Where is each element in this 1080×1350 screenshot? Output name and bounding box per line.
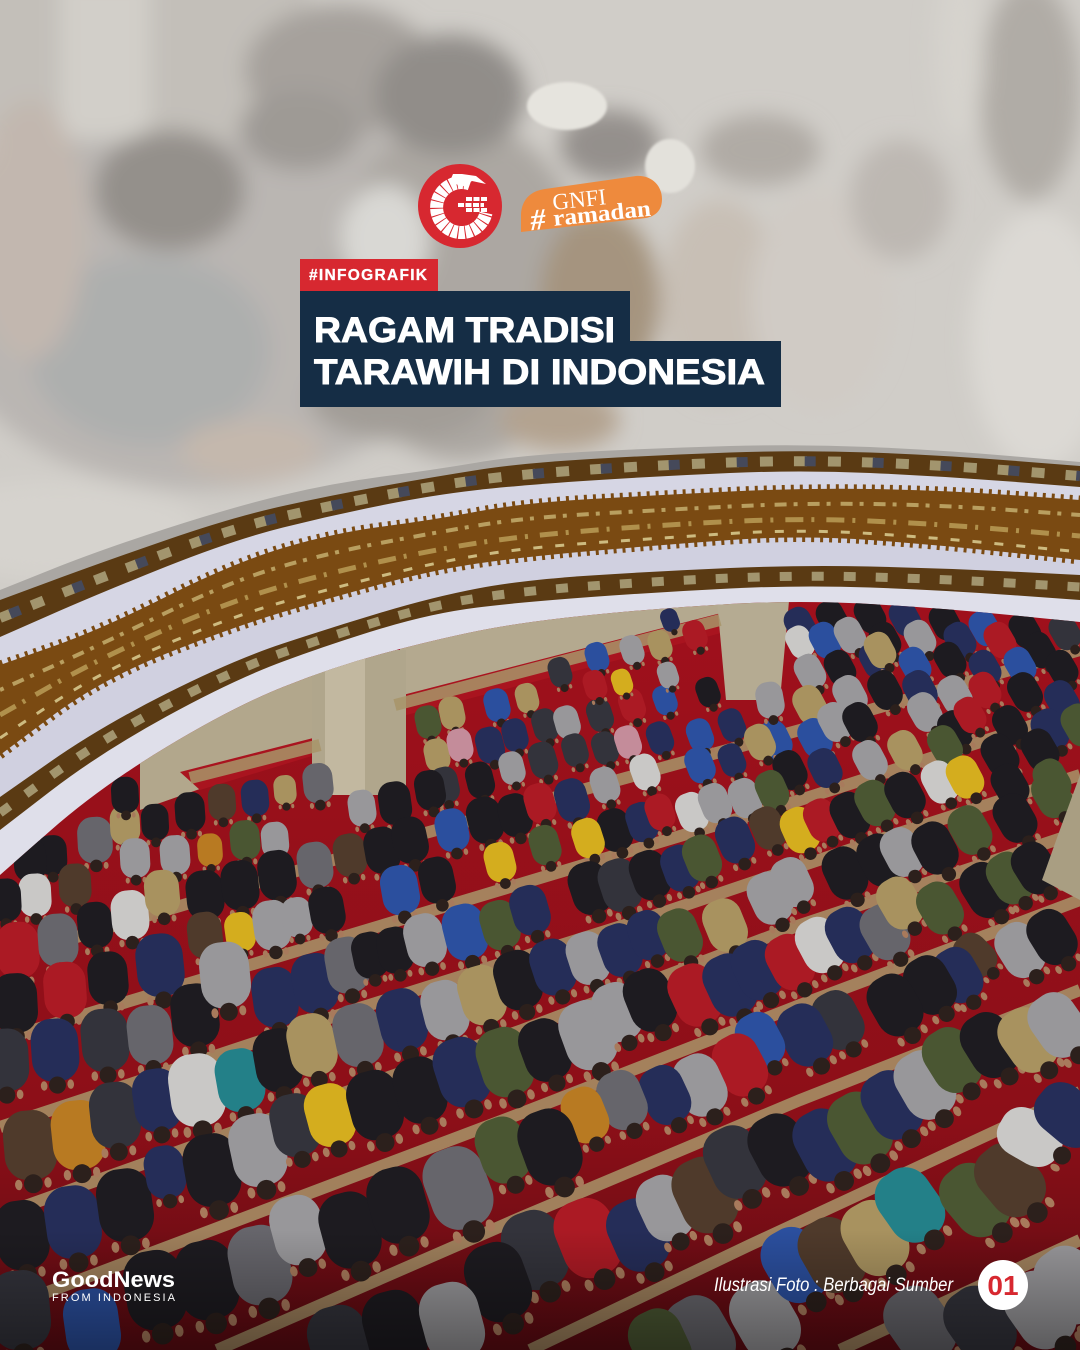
lavender panel [0, 472, 1080, 1000]
rows: upper centre [412, 606, 1080, 819]
floor carpet, walls and pillars [0, 590, 1080, 1350]
page number badge [978, 1260, 1028, 1310]
tag: #INFOGRAFIK: #INFOGRAFIK [309, 267, 428, 284]
lower ornamental band [0, 566, 1080, 1000]
logo: GoodNews from Indonesia: FROM INDONESIA [52, 1292, 176, 1304]
logo: #GNFI ramadan orange badge [521, 176, 662, 237]
row: upper left [0, 766, 797, 990]
logo: #GNFI ramadan orange badge: GNFI [551, 184, 607, 215]
row: front bottom [301, 1073, 1080, 1350]
row: mid low [0, 835, 1080, 1286]
logo: GNFI red emblem [418, 164, 502, 248]
background: hazy blurred photo of worshippers [0, 0, 1080, 620]
calligraphy panel [0, 489, 1080, 1000]
bottom shade [0, 1245, 1080, 1350]
upper ornamental band [0, 451, 1080, 1000]
carpet gold stripes [0, 620, 1080, 1350]
right pillar base [1042, 775, 1080, 900]
mosque floor and crowd seen under the arch [0, 590, 1080, 1350]
ornate white arch with calligraphy [0, 445, 1080, 1000]
tag: #INFOGRAFIK [300, 259, 438, 291]
lavender panel below calligraphy [0, 538, 1080, 1000]
silver rim [0, 445, 1080, 1000]
row: middle [1, 766, 1080, 1195]
row: near arch left [36, 762, 450, 886]
page number badge: 01 [987, 1270, 1019, 1301]
white lower band [0, 586, 1080, 1000]
row: middle upper [0, 750, 993, 1105]
rows: upper right back [762, 602, 1080, 760]
logo: GoodNews from Indonesia [52, 1267, 176, 1304]
title block: RAGAM TRADISI [314, 311, 615, 350]
photo credit: Ilustrasi Foto : Berbagai Sumber [714, 1275, 954, 1296]
worshippers in prostration rows [0, 593, 1080, 1350]
title block [300, 291, 781, 407]
logo: #GNFI ramadan orange badge: # [528, 203, 548, 237]
logo: GoodNews from Indonesia: GoodNews [52, 1267, 175, 1292]
logo: #GNFI ramadan orange badge: ramadan [552, 196, 652, 231]
title block: TARAWIH DI INDONESIA [314, 353, 765, 392]
row: lower [0, 984, 1080, 1350]
